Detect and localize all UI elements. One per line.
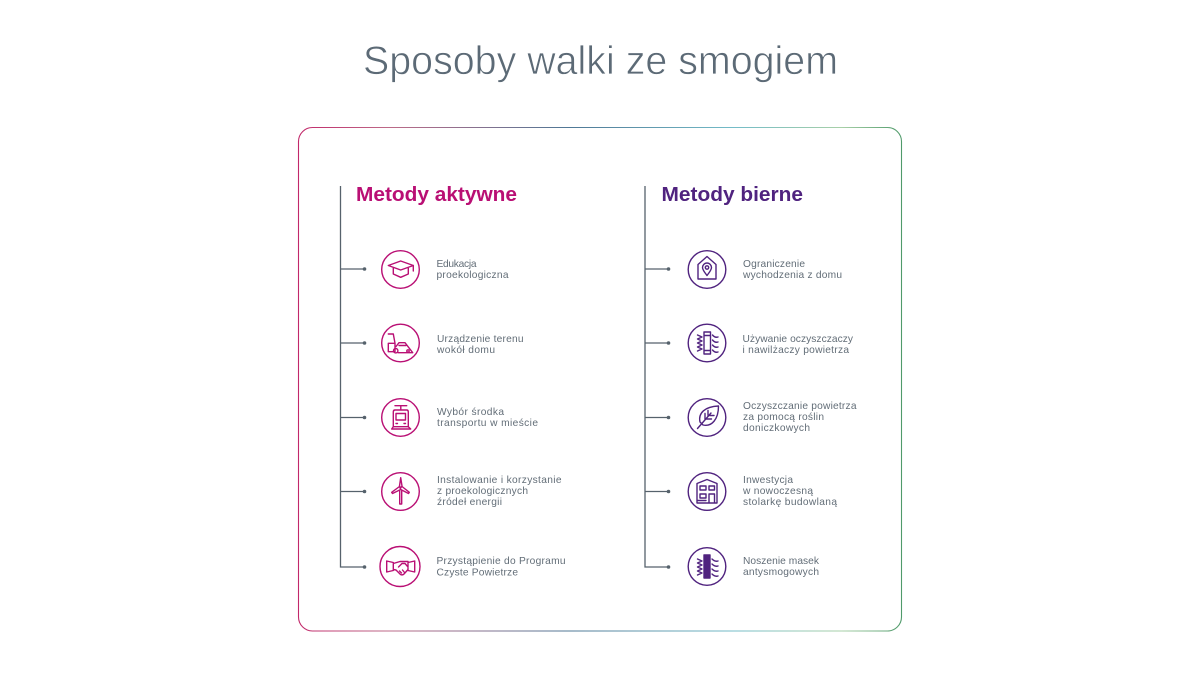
- icon: lawn mower: [382, 324, 419, 362]
- text: purifiers and humidifiers: i nawilżaczy powietrza: [742, 345, 849, 356]
- column: active methods: [340, 184, 566, 586]
- text: clean energy: Instalowanie i korzystanie: [437, 475, 562, 486]
- icon: building with windows: [688, 473, 726, 510]
- text: clean energy: z proekologicznych: [437, 486, 528, 497]
- icon: wind turbine: [382, 473, 419, 510]
- text: clean air programme: Przystąpienie do Programu: [436, 556, 566, 567]
- text: clean energy: źródeł energii: [437, 497, 502, 508]
- timeline: passive methods: [645, 186, 670, 569]
- text: masks: antysmogowych: [743, 567, 819, 578]
- text: transport: [437, 407, 538, 429]
- text: surroundings: wokół domu: [436, 345, 495, 356]
- text: masks: [743, 556, 820, 578]
- text: purifiers and humidifiers: [742, 334, 854, 356]
- text: potted plants: doniczkowych: [743, 423, 810, 434]
- text: clean air programme: [436, 556, 566, 578]
- text: transport: Wybór środka: [437, 407, 504, 418]
- text: clean air programme: Czyste Powietrze: [436, 568, 518, 578]
- text: education: proekologiczna: [436, 270, 509, 281]
- icon: tram: [382, 399, 419, 436]
- text: purifiers and humidifiers: Używanie oczyszczaczy: [742, 334, 854, 345]
- text: potted plants: za pomocą roślin: [743, 412, 824, 423]
- text: staying home: [742, 259, 842, 281]
- title: Sposoby walki ze smogiem: [363, 39, 838, 83]
- text: education: Edukacja: [436, 259, 477, 270]
- icon: air purifier: [688, 324, 726, 362]
- text: windows and joinery: w nowoczesną: [742, 486, 813, 497]
- icon: anti-smog filter: [688, 548, 726, 585]
- timeline: active methods: [340, 186, 366, 569]
- text: potted plants: Oczyszczanie powietrza: [743, 401, 857, 412]
- heading: active methods: Metody aktywne: [356, 184, 517, 206]
- text: windows and joinery: [742, 475, 837, 508]
- panel: methods card: [298, 128, 902, 631]
- icon: graduation cap: [382, 251, 419, 288]
- text: windows and joinery: stolarkę budowlaną: [743, 497, 837, 508]
- text: transport: transportu w mieście: [437, 418, 538, 429]
- text: surroundings: Urządzenie terenu: [437, 334, 524, 345]
- icon: handshake: [380, 546, 420, 586]
- text: staying home: wychodzenia z domu: [742, 270, 842, 281]
- text: surroundings: [436, 334, 524, 356]
- heading: passive methods: Metody bierne: [662, 184, 803, 206]
- text: windows and joinery: Inwestycja: [743, 475, 793, 486]
- text: education: [436, 259, 509, 281]
- text: clean energy: [437, 475, 562, 508]
- icon: house with pin: [688, 251, 726, 288]
- text: potted plants: [743, 401, 857, 434]
- text: masks: Noszenie masek: [743, 556, 820, 567]
- text: staying home: Ograniczenie: [743, 259, 805, 270]
- icon: leaf: [688, 399, 726, 436]
- column: passive methods: [645, 184, 857, 585]
